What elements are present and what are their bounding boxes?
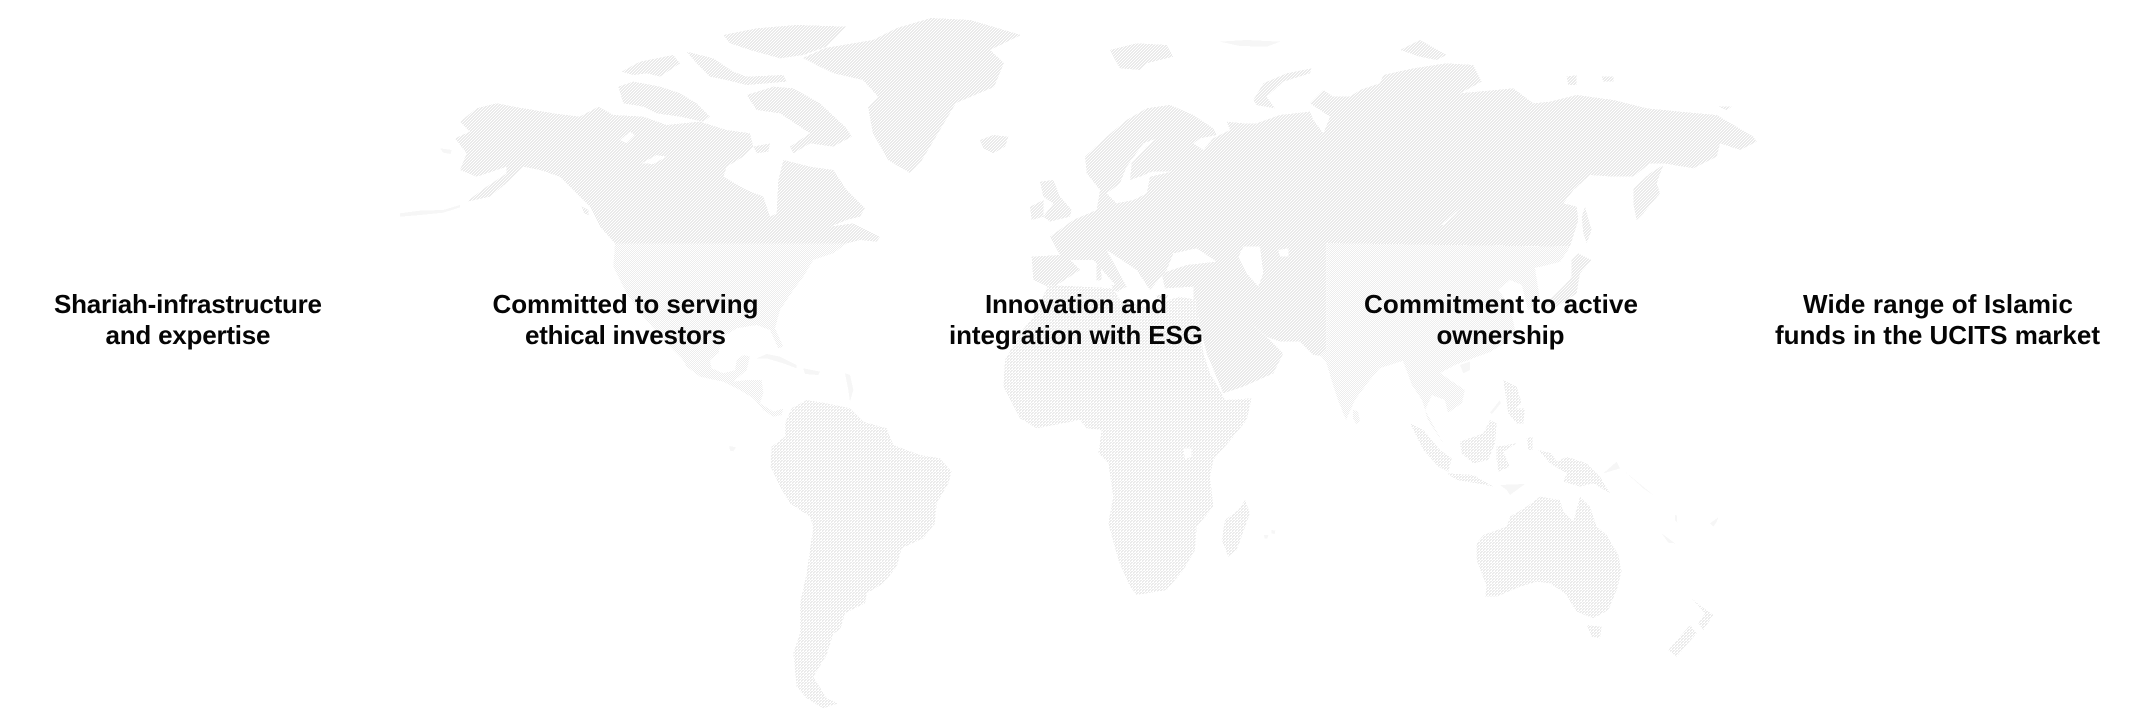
Japan [1543,253,1592,307]
Mediterranean islands [1097,265,1102,281]
label: Committed to serving ethical investors: Committed to serving [492,289,758,319]
Central America and Caribbean [683,354,952,708]
label: Wide range of Islamic funds in the UCITS market: Wide range of Islamic [1803,289,2073,319]
label: Wide range of Islamic funds in the UCITS market [1775,289,2100,350]
label: Wide range of Islamic funds in the UCITS market: funds in the UCITS market [1775,320,2100,350]
Australia [1477,497,1622,618]
North America and Greenland [400,18,1021,360]
label: Committed to serving ethical investors [492,289,758,350]
label: Commitment to active ownership: Commitment to active [1364,289,1638,319]
South-East Asian islands and Oceania [1410,380,1718,657]
Baltic, Caspian and Aral seas [1107,138,1172,203]
label: Committed to serving ethical investors: ethical investors [525,320,726,350]
South America [771,400,952,708]
Madagascar [1222,500,1250,557]
label: Shariah-infrastructure and expertise [54,289,322,350]
Africa [1003,285,1252,595]
New Zealand [1692,598,1713,630]
label: Innovation and integration with ESG: integration with ESG [949,320,1203,350]
label: Commitment to active ownership: ownership [1436,320,1564,350]
label: Innovation and integration with ESG [949,289,1203,350]
China, India and South-East Asia [1320,243,1570,443]
label: Commitment to active ownership [1364,289,1638,350]
label: Shariah-infrastructure and expertise: and expertise [106,320,270,350]
label: Shariah-infrastructure and expertise: Shariah-infrastructure [54,289,322,319]
label: Innovation and integration with ESG: Innovation and [985,289,1167,319]
world map [400,18,1757,708]
Eurasia [980,40,1757,595]
